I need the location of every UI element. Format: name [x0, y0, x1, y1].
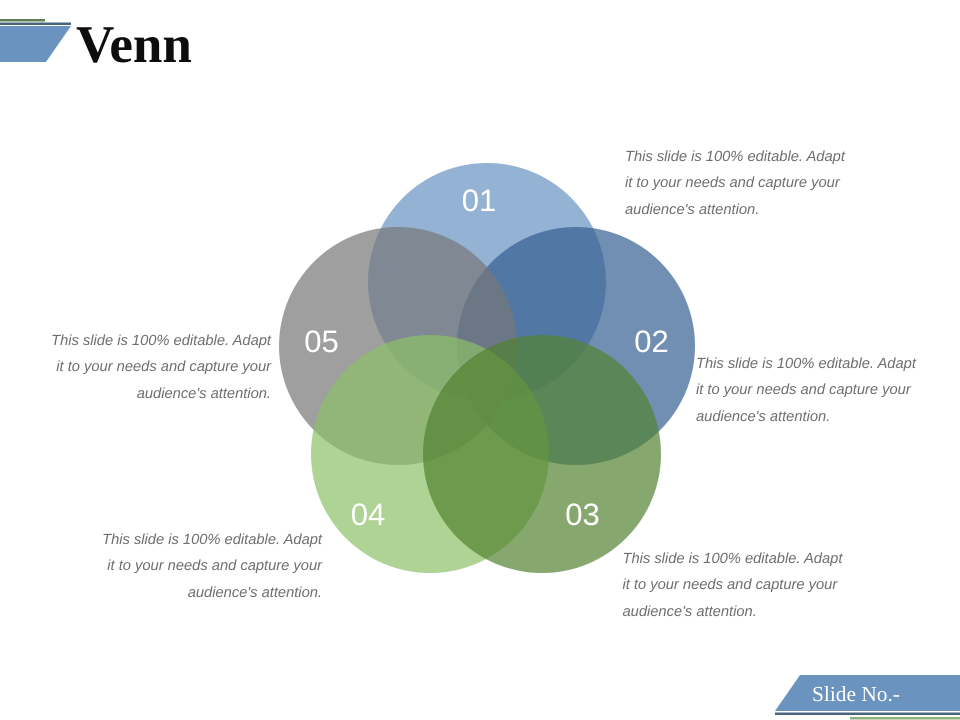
title: Venn [76, 16, 192, 74]
text block 02: audience's attention. [696, 409, 830, 425]
number 04: 04 [351, 497, 385, 532]
text block 01: it to your needs and capture your [625, 175, 841, 191]
number 03: 03 [565, 497, 600, 532]
text block 04: it to your needs and capture your [107, 558, 323, 574]
circle 04 [311, 335, 549, 573]
number 01: 01 [462, 183, 496, 218]
number 02: 02 [634, 324, 669, 359]
text block 05: audience's attention. [137, 386, 271, 402]
header accent [0, 19, 71, 62]
circle 01 [368, 163, 606, 401]
circle 03 [423, 335, 661, 573]
text block 05: This slide is 100% editable. Adapt [51, 333, 272, 349]
text block 03: audience's attention. [622, 604, 757, 620]
footer slide number [775, 675, 960, 720]
text block 04: audience's attention. [188, 585, 322, 601]
text block 01: This slide is 100% editable. Adapt [625, 149, 846, 165]
text block 03: it to your needs and capture your [622, 577, 838, 593]
circle 05 [279, 227, 517, 465]
text block 01: audience's attention. [625, 202, 759, 218]
text block 02: This slide is 100% editable. Adapt [696, 356, 917, 372]
text block 04: This slide is 100% editable. Adapt [102, 532, 323, 548]
text block 02: it to your needs and capture your [696, 382, 912, 398]
number 05: 05 [304, 324, 339, 359]
text block 05: it to your needs and capture your [56, 359, 272, 375]
venn diagram [279, 163, 695, 573]
text block 03: This slide is 100% editable. Adapt [622, 551, 843, 567]
circle 02 [457, 227, 695, 465]
footer slide number: Slide No.- [812, 682, 900, 706]
